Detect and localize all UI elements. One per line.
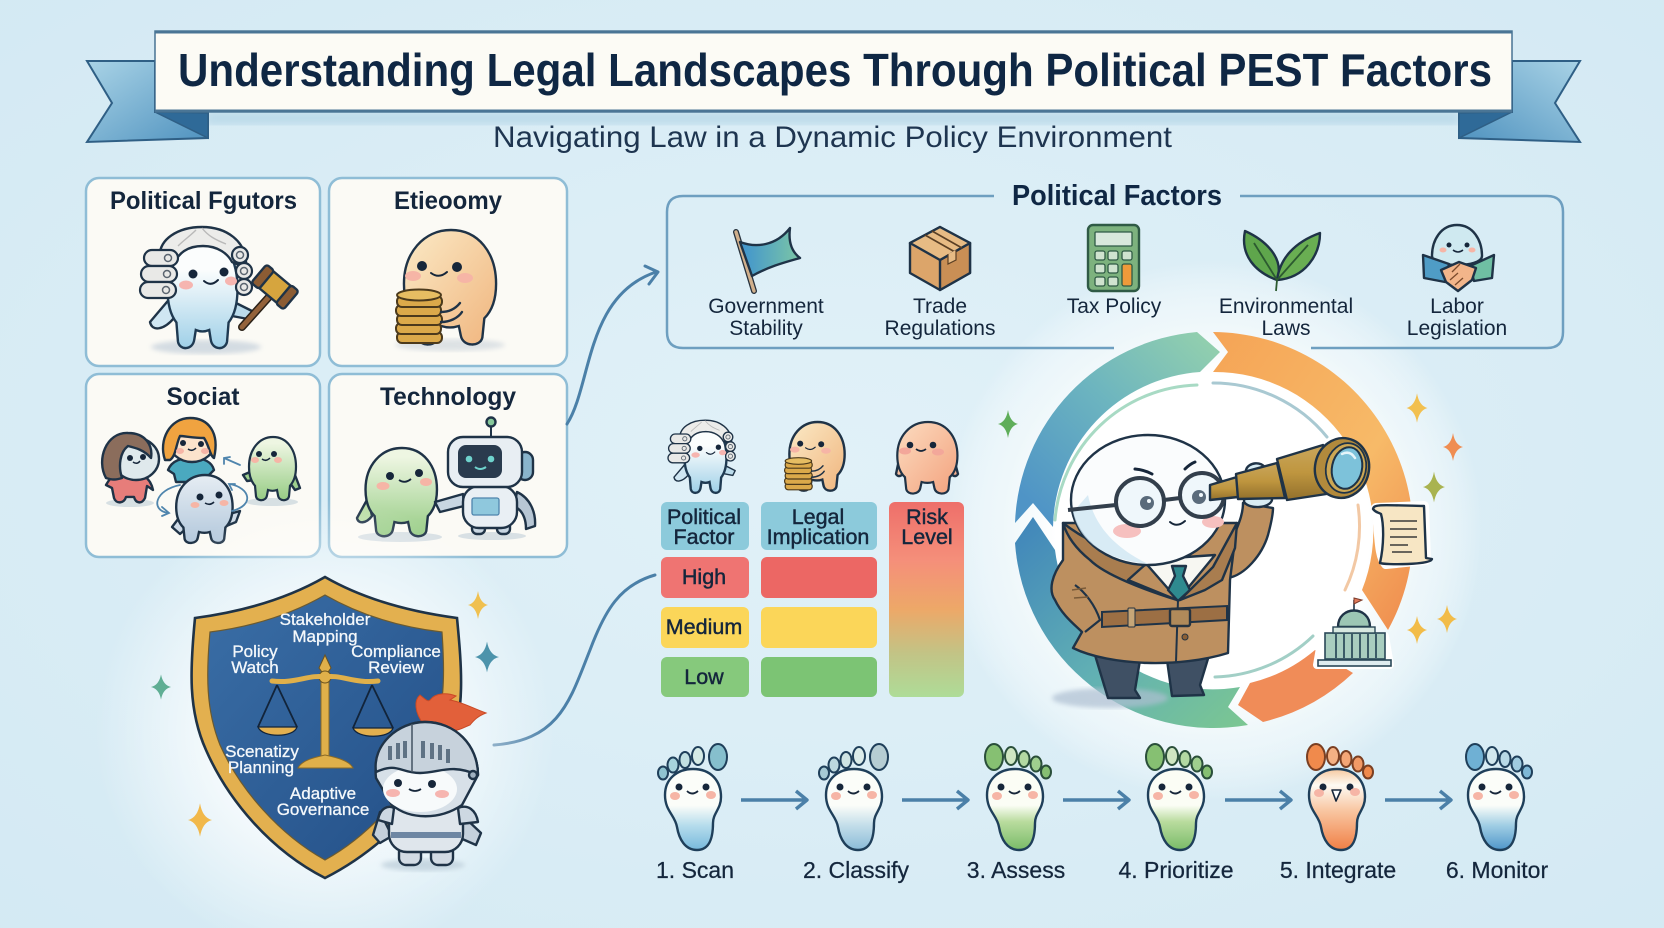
column header: political factor: Factor — [674, 525, 734, 549]
label: government stability: Stability — [729, 317, 803, 340]
icon: gavel — [242, 264, 299, 327]
label: labor legislation: Labor — [1430, 295, 1484, 318]
belt — [1102, 606, 1227, 627]
process step 6: monitor — [1446, 744, 1548, 883]
foot face — [831, 784, 877, 800]
segment: blue-green lower — [1015, 517, 1248, 728]
subtitle: Navigating Law in a Dynamic Policy Environment — [493, 121, 1173, 154]
label: government stability — [708, 295, 824, 340]
foot face — [992, 784, 1038, 800]
right ribbon tail — [1459, 61, 1580, 142]
mini character: judge — [668, 420, 735, 493]
row: high — [661, 557, 877, 598]
label: policy watch — [231, 642, 279, 677]
toes — [1307, 744, 1373, 778]
mini character: risk — [896, 422, 958, 494]
label: tax policy: Tax Policy — [1067, 295, 1162, 318]
helmet — [376, 722, 478, 816]
head — [1071, 435, 1225, 565]
toes — [819, 744, 888, 780]
column header: political factor: Political — [667, 505, 741, 529]
column header: political factor — [661, 502, 749, 550]
character: green with handshake — [357, 448, 437, 536]
icon: handshake character — [1423, 225, 1494, 291]
raised arm — [1218, 503, 1273, 578]
arrow: step 4 to 5 — [1225, 791, 1291, 809]
panel heading: Technology — [380, 383, 516, 411]
label: adaptive governance: Adaptive — [290, 784, 356, 803]
label: scenario planning: Planning — [228, 758, 294, 777]
panel heading: Political Fgutors — [110, 187, 297, 215]
panel: political factors — [667, 180, 1563, 348]
cycle ring — [1015, 332, 1413, 728]
red plume — [416, 694, 486, 731]
mini character: economy — [785, 422, 845, 491]
segment: orange lower — [1238, 650, 1353, 722]
banner shadow — [205, 112, 1460, 124]
knight face — [386, 789, 400, 797]
hip arm crease — [1075, 585, 1100, 632]
label: stakeholder mapping — [280, 610, 371, 646]
process step 5: integrate — [1280, 744, 1396, 883]
arrow: step 5 to 6 — [1385, 791, 1451, 809]
label: trade regulations: Regulations — [885, 317, 995, 340]
panel: economy character — [329, 178, 567, 366]
banner body — [155, 31, 1512, 112]
telescope — [1210, 433, 1375, 503]
row: medium — [661, 607, 877, 648]
arrows: interaction — [157, 457, 247, 516]
foot face — [1473, 784, 1519, 800]
row: low: Low — [684, 665, 724, 689]
panel: technology characters — [329, 374, 567, 557]
process step 1: scan — [656, 744, 734, 883]
process step 2: classify — [803, 744, 910, 883]
face — [1113, 524, 1141, 538]
step label: 3. Assess — [967, 857, 1065, 883]
foot face — [670, 784, 716, 800]
icon: calculator — [1088, 225, 1139, 291]
label: labor legislation: Legislation — [1407, 317, 1507, 340]
toes — [1466, 744, 1532, 778]
step label: 2. Classify — [803, 857, 910, 883]
label: government stability: Government — [708, 295, 824, 318]
panel frame — [667, 196, 1563, 348]
character: green — [243, 437, 300, 506]
row: medium: Medium — [666, 615, 742, 639]
panel: political factors character — [86, 178, 320, 366]
title: Understanding Legal Landscapes Through Political PEST Factors — [178, 44, 1492, 96]
label: trade regulations: Trade — [913, 295, 967, 318]
toes — [985, 744, 1051, 778]
character: detective with telescope — [1052, 433, 1375, 708]
character: brown hair — [102, 433, 159, 507]
column header: legal implication: Implication — [767, 525, 869, 549]
label: adaptive governance — [277, 784, 369, 819]
toes — [658, 744, 727, 780]
segment: orange upper — [1213, 332, 1413, 630]
central glow behind ring — [943, 260, 1483, 800]
character: economy with coins — [396, 230, 496, 344]
arrow: step 3 to 4 — [1063, 791, 1129, 809]
step label: 6. Monitor — [1446, 857, 1548, 883]
segment: blue-green upper — [1015, 332, 1220, 527]
shirt — [1143, 555, 1215, 600]
glow behind shield — [95, 500, 555, 928]
coat — [1052, 523, 1237, 663]
row: high: High — [682, 565, 726, 589]
foot face — [1153, 784, 1199, 800]
label: stakeholder mapping: Stakeholder — [280, 610, 371, 629]
panel: social characters — [86, 374, 320, 557]
process step 4: prioritize — [1118, 744, 1234, 883]
label: adaptive governance: Governance — [277, 800, 369, 819]
process step 3: assess — [967, 744, 1065, 883]
risk matrix — [661, 420, 964, 697]
icon: scales of justice — [258, 655, 393, 768]
label: scenario planning — [225, 742, 299, 777]
character: judge with wig — [140, 227, 252, 348]
arrow: step 2 to 3 — [902, 791, 968, 809]
label: policy watch: Policy — [232, 642, 278, 661]
icon: leaves — [1244, 231, 1320, 291]
column header: legal implication: Legal — [792, 505, 844, 529]
shield face — [208, 595, 444, 860]
label: scenario planning: Scenatizy — [225, 742, 299, 761]
arms — [373, 812, 392, 843]
panel heading: Political Factors — [1012, 180, 1222, 212]
icon: government building — [1317, 598, 1391, 666]
foot face — [1314, 784, 1360, 801]
step label: 5. Integrate — [1280, 857, 1396, 883]
row: low — [661, 657, 877, 697]
column: risk level: Risk — [906, 505, 948, 529]
panel heading: Etieoomy — [394, 187, 502, 215]
left ribbon tail — [87, 61, 208, 142]
tie — [1168, 566, 1190, 601]
label: trade regulations — [885, 295, 995, 340]
character: grey centre — [172, 475, 240, 543]
column: risk level — [889, 502, 964, 697]
step label: 1. Scan — [656, 857, 734, 883]
torso — [389, 800, 463, 852]
coin stack — [396, 290, 442, 343]
title banner — [87, 31, 1580, 142]
sparkles around shield — [151, 591, 499, 837]
icon: box — [910, 227, 970, 290]
legs — [399, 845, 421, 865]
label: environmental laws: Environmental — [1219, 295, 1353, 318]
column header: legal implication — [761, 502, 877, 550]
legs — [1095, 655, 1140, 698]
column: risk level: Level — [901, 525, 953, 549]
shield frame — [192, 577, 461, 878]
strategy shield — [192, 577, 461, 878]
icon: flag — [736, 228, 800, 291]
hand — [1244, 463, 1272, 507]
label: compliance review — [351, 642, 441, 677]
glasses — [1068, 473, 1224, 526]
panel heading: Sociat — [166, 383, 240, 411]
step label: 4. Prioritize — [1118, 857, 1234, 883]
label: compliance review: Compliance — [351, 642, 441, 661]
character: robot — [435, 418, 535, 534]
sparkles around ring — [998, 393, 1463, 644]
label: environmental laws: Laws — [1261, 317, 1311, 340]
toes — [1146, 744, 1212, 778]
label: labor legislation — [1407, 295, 1507, 340]
pauldrons — [378, 807, 394, 824]
label: policy watch: Watch — [231, 658, 279, 677]
character: knight — [373, 694, 486, 871]
character: orange hair — [163, 418, 216, 482]
lapels — [1063, 523, 1177, 600]
label: stakeholder mapping: Mapping — [292, 627, 358, 646]
inner thin ring — [1055, 383, 1360, 677]
label: compliance review: Review — [368, 658, 425, 677]
label: environmental laws — [1219, 295, 1353, 340]
icon: scroll — [1373, 505, 1432, 564]
arrow: shield to matrix — [494, 575, 655, 745]
arrow: matrix to political factors — [567, 266, 658, 424]
arrow: step 1 to 2 — [741, 791, 807, 809]
